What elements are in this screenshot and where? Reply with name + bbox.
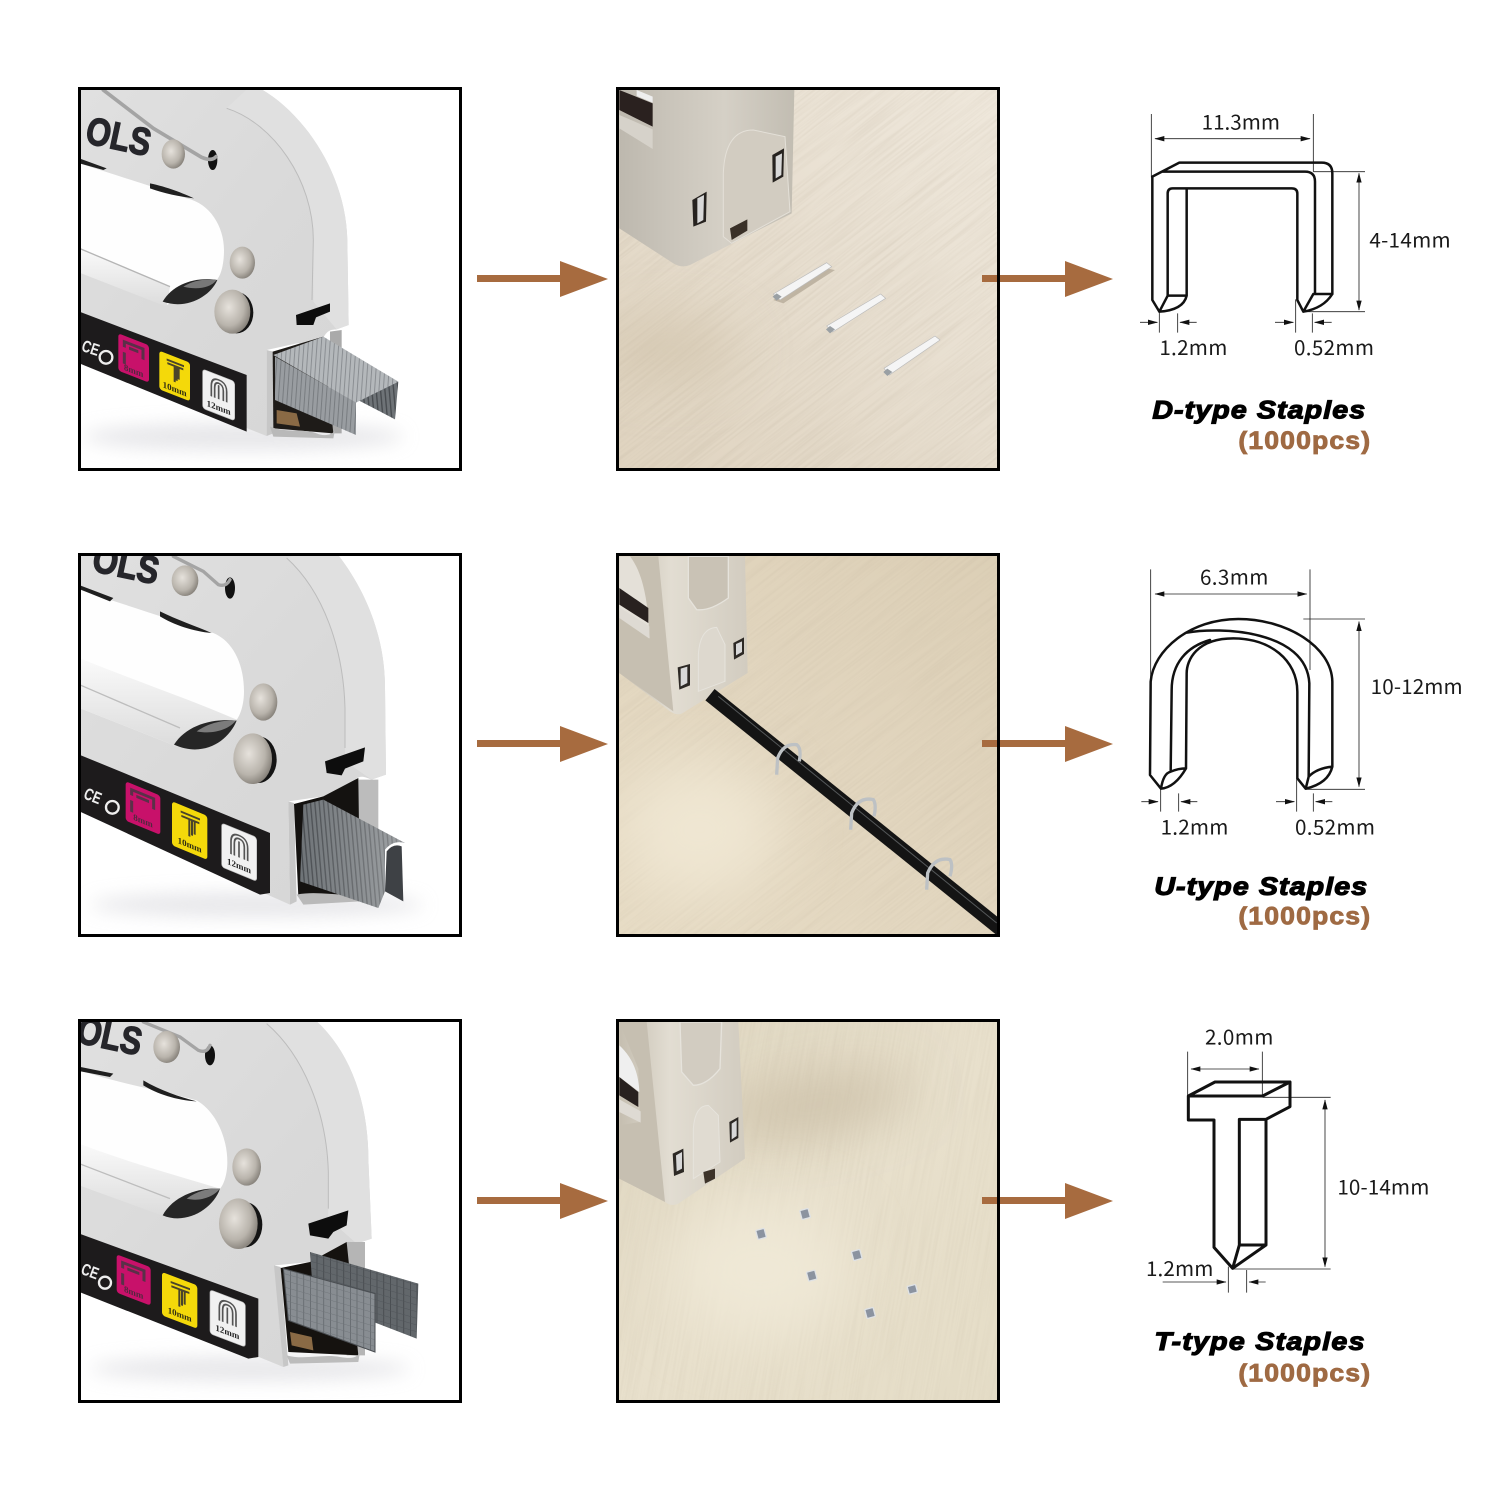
spec label: [79, 755, 270, 895]
row 3: arrow to application photo: [477, 1183, 608, 1219]
cable with U-type staples: [710, 695, 1002, 930]
stapler body: OLS: [82, 109, 155, 165]
T-type staple diagram: 1.2mm: [1146, 1252, 1213, 1282]
D-type staples in wood: [773, 263, 940, 376]
row 3: arrow to diagram: [982, 1183, 1113, 1219]
D-type staple diagram: 0.52mm: [1294, 331, 1374, 361]
spec label: [79, 312, 247, 432]
U-type staple diagram: 6.3mm: [1200, 560, 1268, 590]
spec label: CE: [79, 1260, 101, 1283]
stapler body: OLS: [89, 537, 163, 593]
T-type staple heads in wood: [756, 1208, 918, 1319]
row 3: application photo on wood: [619, 1022, 997, 1400]
U-type staple stack: [300, 800, 405, 908]
T-type staple diagram: [1146, 1020, 1429, 1387]
spec label: 8mm: [124, 1285, 144, 1302]
stapler head: [619, 90, 940, 376]
U-type staple diagram: [1141, 560, 1463, 930]
stapler head: [619, 556, 1002, 930]
D-type staple diagram: 1.2mm: [1159, 331, 1227, 361]
U-type staple diagram: 1.2mm: [1161, 810, 1228, 840]
spec label: 12mm: [227, 857, 251, 877]
spec label: CE: [81, 784, 104, 808]
D-type staple diagram: [1140, 105, 1451, 455]
spec label: 12mm: [207, 399, 231, 418]
stapler body: [79, 537, 423, 916]
D-type staple stack: [273, 337, 398, 435]
row 2: arrow to diagram: [982, 726, 1113, 762]
T-type quantity: (1000pcs): [1238, 1361, 1370, 1387]
D-type outline: [1152, 163, 1332, 312]
row 2: stapler photo with U-type staples: [81, 556, 412, 920]
spec label: 8mm: [124, 363, 144, 380]
stapler body: [79, 89, 403, 450]
row 1: application photo on wood: [619, 90, 997, 468]
U-type title: U-type Staples: [1154, 873, 1367, 901]
stapler body: [73, 1009, 418, 1380]
T-type staple diagram: 2.0mm: [1205, 1020, 1273, 1050]
U-type quantity: (1000pcs): [1238, 904, 1370, 930]
row 1: arrow to application photo: [477, 261, 608, 297]
row 2: application photo with cable: [619, 556, 997, 934]
D-type staple diagram: 11.3mm: [1202, 105, 1280, 135]
spec label: 10mm: [168, 1306, 192, 1325]
U-type staple diagram: 0.52mm: [1295, 810, 1375, 840]
D-type quantity: (1000pcs): [1238, 428, 1370, 455]
row 3: stapler photo with T-type staples: [81, 1022, 418, 1384]
D-type title: D-type Staples: [1152, 396, 1365, 424]
spec label: [79, 1234, 258, 1359]
stapler body: OLS: [73, 1009, 146, 1064]
U-type staple diagram: 10-12mm: [1371, 670, 1463, 700]
spec label: 10mm: [163, 381, 187, 400]
T-type staple strips: [283, 1252, 418, 1352]
nose notch and cavity: [274, 1210, 365, 1367]
D-type staple diagram: 4-14mm: [1369, 223, 1451, 253]
T-type staple diagram: 10-14mm: [1337, 1170, 1429, 1200]
stapler head: [619, 1022, 918, 1319]
row 1: arrow to diagram: [982, 261, 1113, 297]
nose notch and cavity: [288, 747, 378, 905]
row 2: arrow to application photo: [477, 726, 608, 762]
spec label: CE: [79, 336, 102, 360]
panel frames: [80, 88, 998, 1402]
row 1: stapler photo with D-type staples: [81, 90, 398, 454]
spec label: 12mm: [215, 1324, 240, 1342]
nose notch and cavity: [267, 303, 342, 438]
T-type outline: [1188, 1082, 1290, 1268]
spec label: 10mm: [178, 836, 202, 856]
U-type outline: [1150, 619, 1332, 789]
spec label: 8mm: [133, 813, 153, 831]
T-type title: T-type Staples: [1154, 1328, 1365, 1356]
